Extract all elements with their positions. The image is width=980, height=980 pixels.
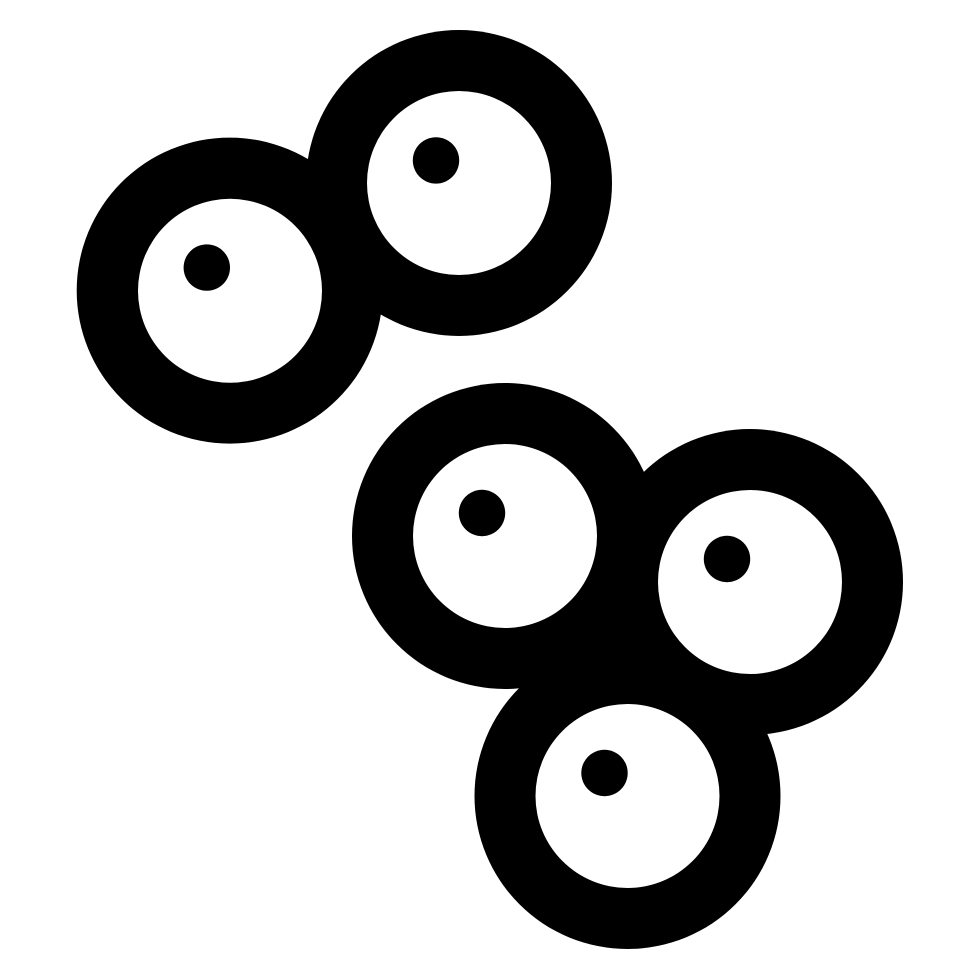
upper cell pair <box>77 30 612 444</box>
lower cell trio <box>352 383 903 949</box>
